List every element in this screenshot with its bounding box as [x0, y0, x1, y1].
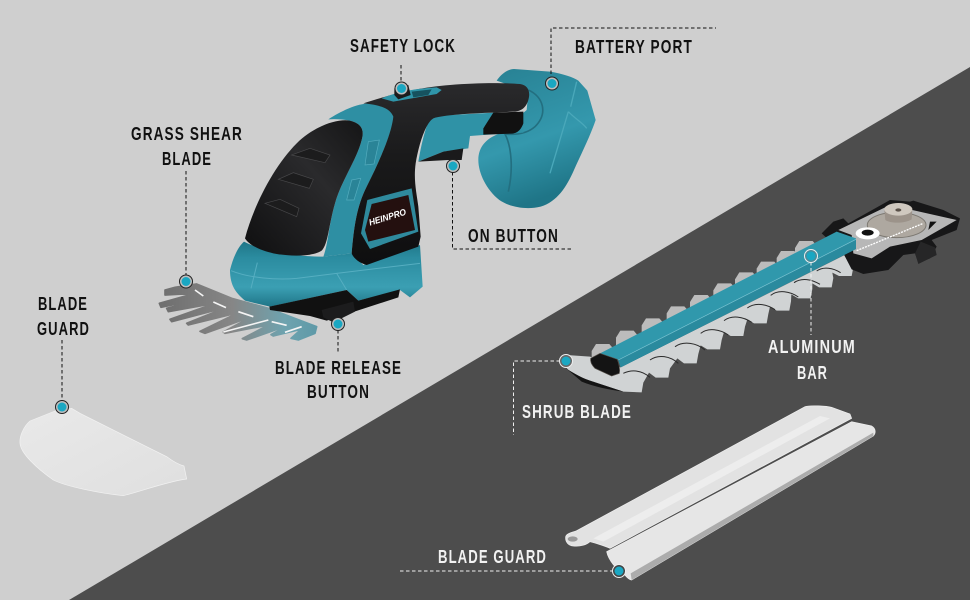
label: battery port: BATTERY PORT	[575, 37, 693, 57]
bar end cap	[591, 353, 620, 376]
lower channel	[607, 422, 875, 580]
label: blade guard small: GUARD	[37, 319, 90, 339]
marker: shrub blade	[560, 354, 572, 368]
label: aluminum bar: ALUMINUM	[768, 337, 856, 357]
bar lower face	[618, 239, 856, 367]
tube end	[568, 536, 578, 542]
brand name: HEINPRO	[368, 207, 407, 228]
safety lock button	[394, 85, 411, 99]
label: shrub blade: SHRUB BLADE	[522, 402, 632, 422]
marker: blade guard long	[612, 564, 626, 578]
blade highlights	[195, 290, 302, 332]
leader: blade release button	[337, 330, 339, 353]
aluminum bar	[600, 232, 856, 367]
label: blade guard long: BLADE GUARD	[438, 547, 547, 567]
marker: blade guard small	[56, 400, 68, 414]
grip ridges	[265, 148, 330, 217]
base housing	[230, 242, 423, 307]
leader: aluminum bar	[810, 262, 812, 335]
label: on button: ON BUTTON	[468, 226, 559, 246]
label: grass shear blade: GRASS SHEAR	[131, 124, 243, 144]
leader: grass shear blade	[185, 171, 187, 276]
tooth slot shadows	[623, 268, 841, 377]
marker: battery port	[546, 77, 558, 90]
grass shear blade	[159, 284, 317, 340]
mount gear disk	[867, 212, 926, 238]
base contour	[231, 263, 420, 290]
label: blade release button: BLADE RELEASE	[275, 358, 402, 378]
marker: blade release button	[332, 318, 344, 330]
blade guard: long	[566, 406, 875, 580]
safety lock slot	[412, 89, 432, 97]
battery housing	[478, 69, 596, 208]
battery side facet	[550, 82, 587, 173]
label: safety lock: SAFETY LOCK	[350, 36, 456, 56]
grass shear tool	[230, 69, 596, 322]
blade body and tines	[159, 284, 317, 340]
underside black	[269, 289, 400, 321]
label: grass shear blade	[131, 124, 243, 169]
label: aluminum bar	[768, 337, 856, 383]
mount dark notch	[928, 222, 937, 230]
black handle	[352, 83, 529, 265]
mount white clip	[856, 227, 880, 239]
upper teeth	[592, 241, 817, 360]
blade guard: small	[20, 408, 187, 496]
brand plate	[361, 188, 418, 249]
marker: safety lock	[395, 82, 408, 95]
leader: on button	[452, 172, 572, 249]
teal under-handle trigger housing	[418, 113, 523, 162]
mount plate silver	[838, 205, 957, 258]
upper channel highlight	[593, 416, 830, 542]
label: blade release button	[275, 358, 402, 402]
black grip	[245, 120, 363, 256]
marker: on button	[446, 160, 460, 172]
label: blade guard small: BLADE	[38, 294, 88, 314]
marker: grass shear blade	[180, 275, 192, 288]
lower toothed blade	[560, 251, 872, 392]
leader: shrub blade	[514, 361, 560, 435]
mount hub	[884, 203, 912, 223]
on button trigger	[418, 148, 463, 162]
label: blade guard small	[37, 294, 90, 339]
leader: safety lock	[400, 65, 402, 84]
leader: battery port	[551, 28, 716, 80]
marker: aluminum bar	[804, 250, 818, 262]
mount plate frame	[822, 200, 960, 274]
leader: blade guard small	[61, 340, 63, 401]
lower shade	[631, 433, 873, 580]
label: aluminum bar: BAR	[797, 363, 828, 383]
shrub blade attachment	[560, 200, 960, 392]
mount dashed highlight	[857, 223, 923, 251]
leader: blade guard long	[400, 570, 612, 572]
mount side latch	[915, 242, 937, 264]
upper channel	[566, 406, 852, 548]
label: grass shear blade: BLADE	[162, 149, 212, 169]
bar highlight	[618, 239, 856, 360]
vents on side shell	[347, 140, 379, 200]
safety lock slider	[382, 87, 442, 102]
blade release button	[322, 302, 355, 322]
label: blade release button: BUTTON	[307, 382, 370, 402]
battery neck contour	[505, 90, 543, 192]
blade tip black edge	[565, 367, 623, 392]
teal side shell	[323, 103, 394, 257]
black handle insert	[483, 112, 523, 135]
